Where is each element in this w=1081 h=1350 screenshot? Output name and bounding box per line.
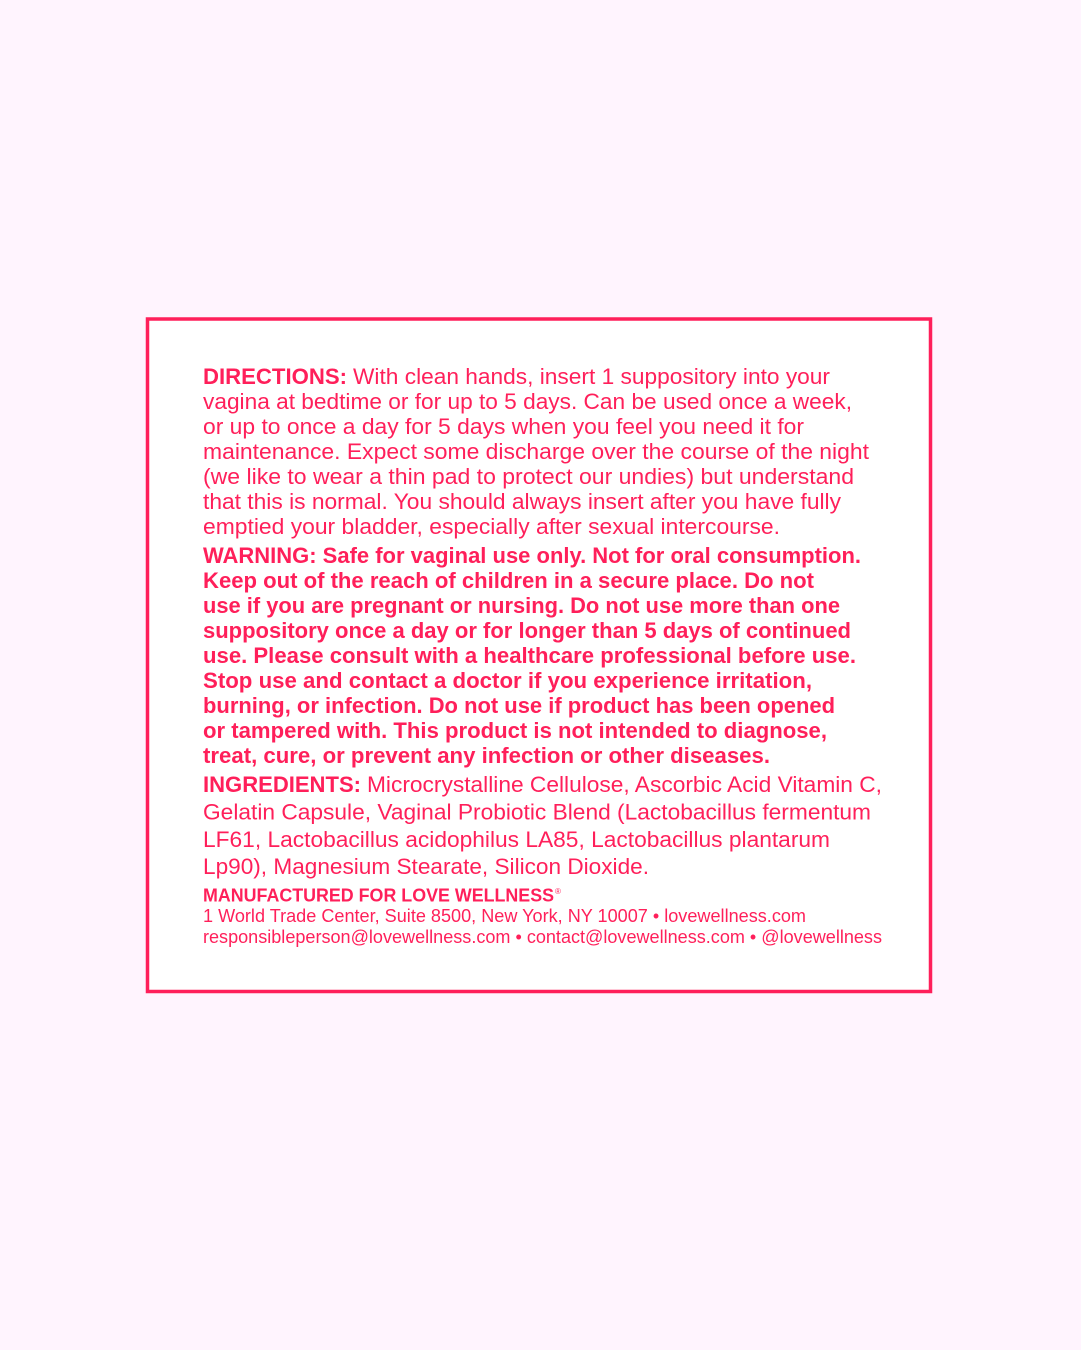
warning text block: Stop use and contact a doctor if you experience irritation, — [203, 668, 812, 693]
directions text block — [203, 364, 870, 539]
directions text block: emptied your bladder, especially after sexual intercourse. — [203, 514, 780, 539]
manufacturer details: MANUFACTURED FOR LOVE WELLNESS — [203, 886, 554, 906]
label panel — [148, 319, 930, 992]
ingredients text block — [203, 772, 882, 879]
directions text block: vagina at bedtime or for up to 5 days. Can be used once a week, — [203, 389, 852, 414]
ingredients text block: LF61, Lactobacillus acidophilus LA85, Lactobacillus plantarum — [203, 827, 830, 852]
manufacturer details: responsibleperson@lovewellness.com • contact@lovewellness.com • @lovewellness — [203, 927, 882, 947]
manufacturer details — [203, 886, 882, 947]
directions text block: that this is normal. You should always insert after you have fully — [203, 489, 842, 514]
ingredients text block: Gelatin Capsule, Vaginal Probiotic Blend (Lactobacillus fermentum — [203, 800, 871, 824]
warning text block: use if you are pregnant or nursing. Do not use more than one — [203, 593, 840, 618]
manufacturer details: 1 World Trade Center, Suite 8500, New York, NY 10007 • lovewellness.com — [203, 906, 806, 926]
directions text block: DIRECTIONS: — [203, 364, 347, 389]
directions text block: or up to once a day for 5 days when you feel you need it for — [203, 414, 805, 439]
directions text block: (we like to wear a thin pad to protect our undies) but understand — [203, 464, 854, 489]
warning text block: burning, or infection. Do not use if product has been opened — [203, 693, 835, 718]
warning text block: or tampered with. This product is not intended to diagnose, — [203, 718, 827, 743]
warning text block: WARNING: Safe for vaginal use only. Not for oral consumption. — [203, 543, 861, 568]
directions text block: With clean hands, insert 1 suppository into your — [353, 364, 831, 389]
directions text block: maintenance. Expect some discharge over the course of the night — [203, 439, 870, 464]
warning text block: Keep out of the reach of children in a secure place. Do not — [203, 568, 814, 593]
manufacturer details: ® — [555, 887, 561, 896]
warning text block: use. Please consult with a healthcare professional before use. — [203, 643, 856, 668]
warning text block — [203, 543, 861, 768]
ingredients text block: Microcrystalline Cellulose, Ascorbic Acid Vitamin C, — [367, 772, 882, 797]
ingredients text block: Lp90), Magnesium Stearate, Silicon Dioxide. — [203, 854, 649, 879]
warning text block: treat, cure, or prevent any infection or other diseases. — [203, 743, 770, 768]
warning text block: suppository once a day or for longer than 5 days of continued — [203, 618, 851, 643]
ingredients text block: INGREDIENTS: — [203, 772, 361, 797]
